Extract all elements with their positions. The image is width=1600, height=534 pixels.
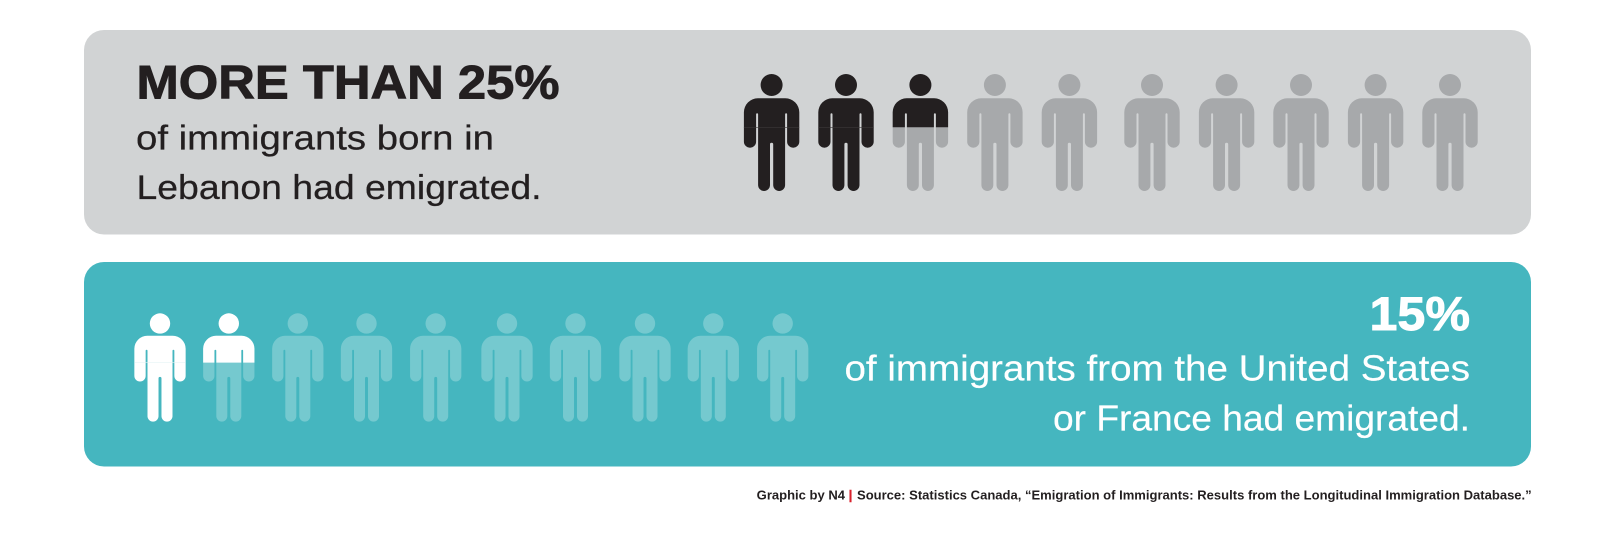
text block: Lebanon description: Lebanon had emigrated. — [136, 169, 542, 207]
text block: Lebanon description: of immigrants born in — [136, 119, 494, 157]
icon: half filled person — [893, 74, 948, 191]
icon: half filled person — [203, 313, 254, 422]
source credit: | — [849, 488, 852, 502]
panel: United States or France — [84, 262, 1531, 466]
text block: Lebanon description — [136, 119, 542, 207]
icon: filled person — [134, 313, 186, 422]
icon: filled person 1 — [744, 74, 799, 191]
icon row: ten people, 1.5 filled — [134, 313, 808, 422]
icon: filled person 2 — [818, 74, 874, 191]
source credit: Graphic by N4 — [757, 488, 845, 502]
text block: US and France description: of immigrants from the United States — [844, 348, 1470, 389]
text block: US and France description — [844, 348, 1470, 439]
icon: faded people group — [272, 313, 808, 422]
panel background: grey — [84, 30, 1531, 234]
icon row: ten people, 2.5 filled — [744, 74, 1478, 191]
panel: Lebanon — [84, 30, 1531, 234]
text block: US and France description: or France had emigrated. — [1053, 398, 1470, 439]
source credit: Source: Statistics Canada, “Emigration of Immigrants: Results from the Longitudinal Immigration Database.” — [857, 488, 1532, 502]
icon: grey people group — [967, 74, 1478, 191]
heading: more than 25%: MORE THAN 25% — [136, 56, 560, 109]
panel background: teal — [84, 262, 1531, 466]
heading: 15%: 15% — [1370, 288, 1470, 341]
